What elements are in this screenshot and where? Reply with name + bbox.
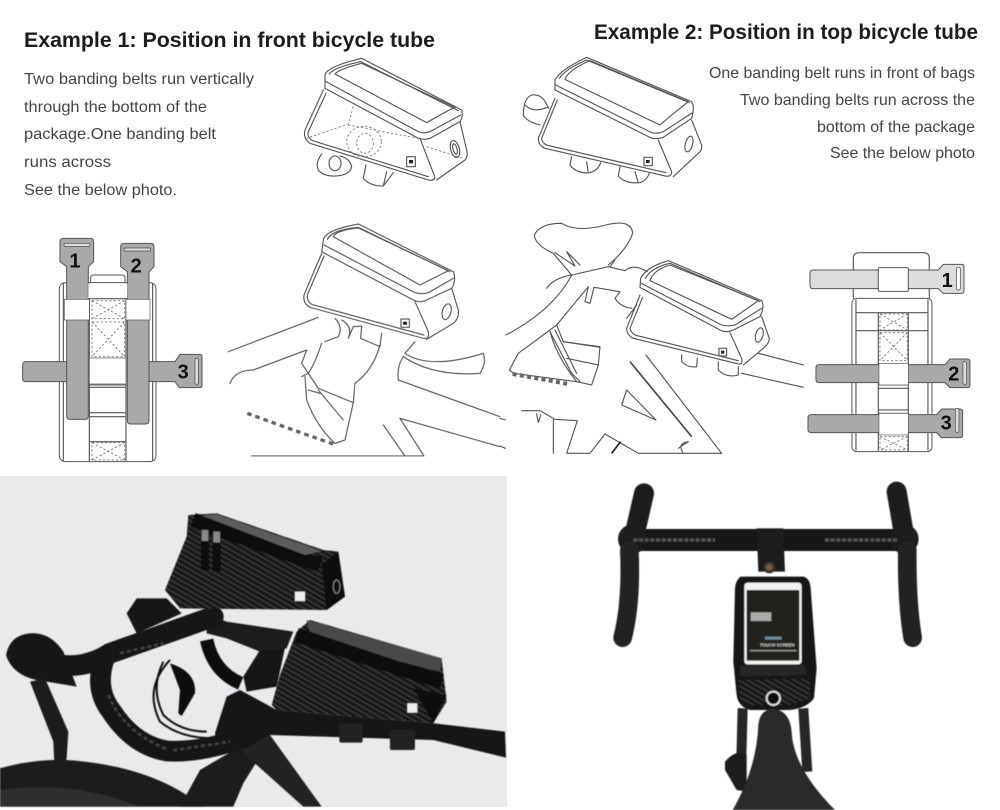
strap 2: 2 [131, 256, 142, 278]
frame: head tube and top tube [215, 690, 506, 758]
text block: example 1 instructions: runs across [24, 154, 111, 171]
bag: TOUCH SCREEN [760, 643, 795, 648]
lower bag [272, 620, 447, 723]
text block: example 1 instructions: through the bottom of the [24, 99, 207, 116]
text block: example 2 instructions: Two banding belts run across the [740, 92, 975, 109]
rear bar [127, 598, 182, 633]
diagram: example 2 strap layout [808, 253, 970, 452]
strap 3: 3 [941, 412, 952, 434]
right drop [889, 492, 919, 638]
stem [757, 528, 785, 572]
strap 1: 1 [69, 251, 80, 273]
strap 3: 3 [178, 362, 189, 384]
text block: example 2 instructions: See the below photo [830, 145, 975, 162]
photo: bag on bike, rider view [618, 492, 919, 810]
illustration: bag with straps under tube [304, 57, 702, 186]
saddle [733, 709, 835, 810]
strap 2 [121, 243, 154, 424]
heading: example 1: Example 1: Position in front bicycle tube [24, 29, 435, 52]
handlebar [628, 507, 908, 573]
diagram: example 1 strap layout [23, 238, 202, 462]
rear derailleur [725, 753, 747, 792]
text block: example 1 instructions: See the below photo. [24, 182, 177, 199]
text block: example 1 instructions [24, 71, 254, 199]
strap 1 [60, 238, 94, 419]
heading: example 2: Example 2: Position in top bicycle tube [594, 21, 978, 44]
handlebar [60, 617, 213, 666]
strap 3 [808, 408, 963, 438]
text block: example 1 instructions: package.One banding belt [24, 126, 217, 143]
rear bar curve [207, 640, 241, 683]
text block: example 2 instructions: One banding belt runs in front of bags [709, 65, 975, 82]
frame: fork [180, 747, 257, 807]
left drop [618, 493, 647, 638]
strap 1 [810, 264, 964, 293]
cable guard [170, 663, 195, 716]
brake lever [30, 678, 68, 782]
strap 2 [816, 359, 970, 388]
bag [733, 577, 817, 710]
seat stays [741, 708, 807, 785]
tyre [0, 760, 203, 807]
steerer [243, 640, 287, 692]
stem [207, 613, 293, 652]
illustration: bag on front tube of bike [228, 224, 500, 456]
frame: down tube [240, 735, 322, 807]
text block: example 2 instructions [709, 65, 975, 162]
strap 1: 1 [942, 270, 953, 292]
text block: example 1 instructions: Two banding belts run vertically [24, 71, 254, 88]
tube clamps [339, 723, 415, 750]
cables [154, 660, 213, 738]
brake hood [6, 633, 77, 687]
text block: example 2 instructions: bottom of the package [817, 119, 975, 136]
photo: two bags on bike, side view [0, 476, 507, 807]
upper bag [165, 513, 345, 610]
strap 2: 2 [948, 364, 959, 386]
strap 3 [23, 354, 202, 388]
illustration: bag on top tube of bike [500, 223, 803, 453]
